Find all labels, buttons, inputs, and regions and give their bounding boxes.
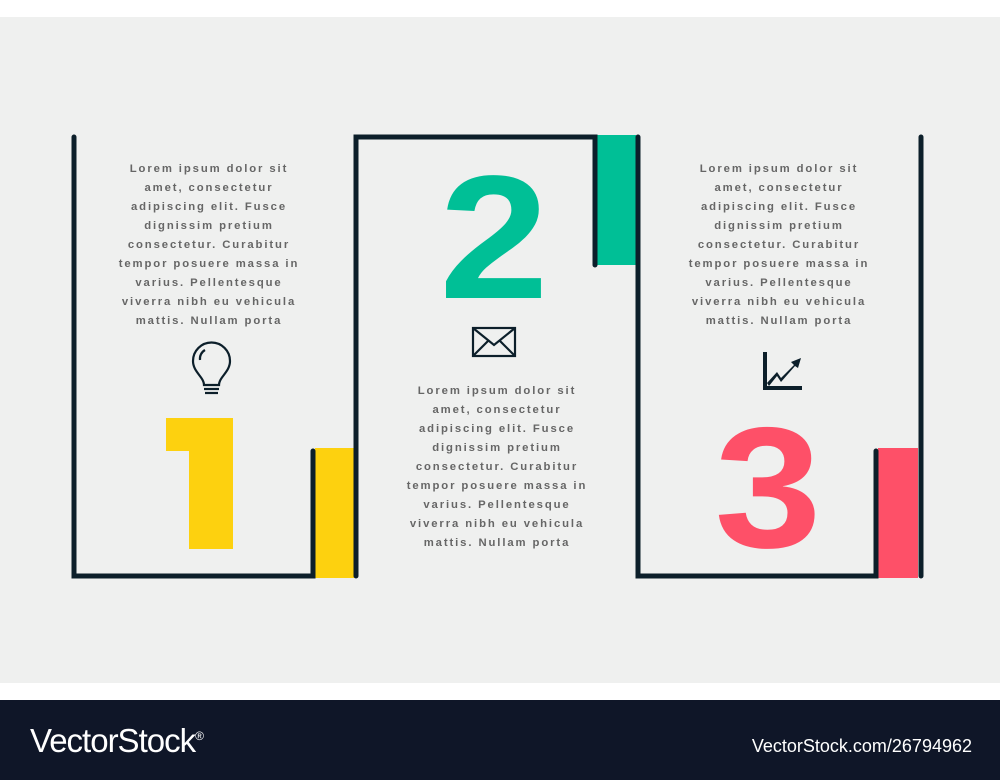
text block 3: amet, consectetur: [714, 182, 844, 194]
logo text: VectorStock®: [30, 722, 203, 759]
text block 3: viverra nibh eu vehicula: [692, 296, 866, 308]
text block 2: varius. Pellentesque: [423, 499, 571, 511]
text block 3: adipiscing elit. Fusce: [701, 201, 857, 213]
text block 3: varius. Pellentesque: [705, 277, 853, 289]
text block 2: amet, consectetur: [432, 404, 562, 416]
text block 3: mattis. Nullam porta: [706, 315, 852, 327]
text block 2: tempor posuere massa in: [407, 480, 587, 492]
text block 1: dignissim pretium: [144, 220, 274, 232]
text block 2: viverra nibh eu vehicula: [410, 518, 584, 530]
number 2: 2: [439, 139, 549, 336]
text block 3: tempor posuere massa in: [689, 258, 869, 270]
text block 2: [406, 385, 587, 549]
number 1: [166, 418, 233, 549]
text block 3: consectetur. Curabitur: [698, 239, 860, 251]
text block 1: [118, 163, 299, 327]
text block 3: [688, 163, 869, 327]
text block 1: consectetur. Curabitur: [128, 239, 290, 251]
number 3: 3: [714, 392, 822, 584]
frame outlines: [74, 137, 921, 576]
text block 2: Lorem ipsum dolor sit: [418, 385, 576, 397]
text block 1: adipiscing elit. Fusce: [131, 201, 287, 213]
image id: VectorStock.com/26794962: [752, 736, 972, 756]
text block 2: adipiscing elit. Fusce: [419, 423, 575, 435]
text block 2: consectetur. Curabitur: [416, 461, 578, 473]
text block 1: amet, consectetur: [144, 182, 274, 194]
footer watermark: [0, 700, 1000, 780]
text block 3: Lorem ipsum dolor sit: [700, 163, 858, 175]
block: yellow: [315, 448, 354, 578]
text block 1: Lorem ipsum dolor sit: [130, 163, 288, 175]
text block 2: dignissim pretium: [432, 442, 562, 454]
text block 1: mattis. Nullam porta: [136, 315, 282, 327]
icon: light bulb: [193, 342, 230, 393]
text block 1: tempor posuere massa in: [119, 258, 299, 270]
icon: growth chart: [763, 352, 802, 390]
block: red: [878, 448, 918, 578]
text block 2: mattis. Nullam porta: [424, 537, 570, 549]
icon: envelope: [473, 328, 515, 356]
block: teal: [597, 135, 636, 265]
text block 1: varius. Pellentesque: [135, 277, 283, 289]
text block 1: viverra nibh eu vehicula: [122, 296, 296, 308]
text block 3: dignissim pretium: [714, 220, 844, 232]
